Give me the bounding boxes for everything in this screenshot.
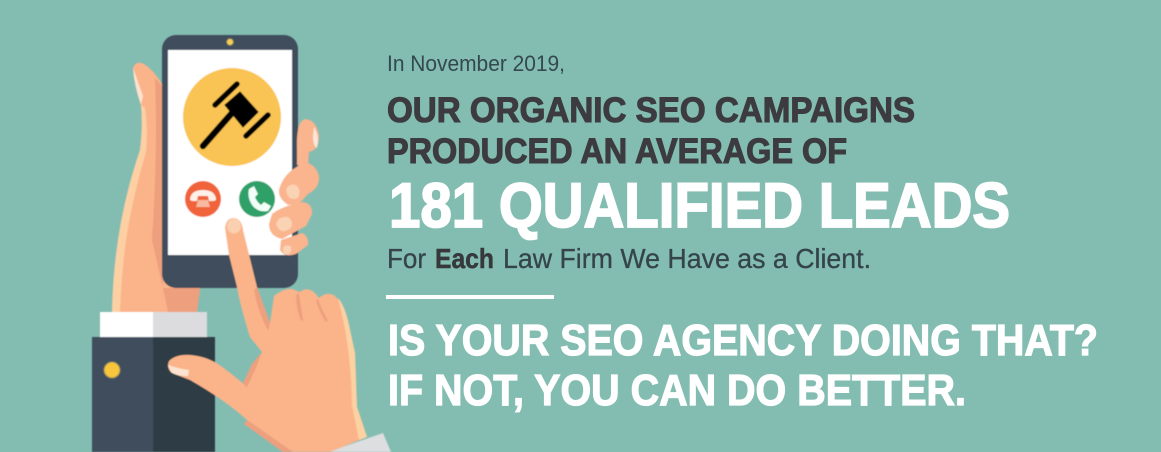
sub-statement: For <box>387 243 426 274</box>
key statistic: 181 QUALIFIED LEADS <box>389 171 1010 241</box>
jacket sleeve <box>92 337 215 452</box>
call to action: IF NOT, YOU CAN DO BETTER. <box>388 366 966 415</box>
call to action: IS YOUR SEO AGENCY DOING THAT? <box>388 316 1098 365</box>
left hand fingers <box>269 119 319 255</box>
divider <box>386 295 554 299</box>
sleeve button <box>104 362 120 378</box>
fingernail <box>227 218 241 234</box>
headline: OUR ORGANIC SEO CAMPAIGNS <box>387 91 915 130</box>
phone screen <box>168 50 292 255</box>
call to action <box>388 316 1098 415</box>
icon: accept call <box>239 181 275 217</box>
thumbnail <box>168 365 189 376</box>
right hand pointing <box>168 218 367 452</box>
headline: PRODUCED AN AVERAGE OF <box>387 132 847 171</box>
icon: decline call <box>185 181 221 217</box>
phone <box>162 35 298 288</box>
illustration: hands holding phone <box>92 35 391 452</box>
right shirt cuff <box>328 433 391 452</box>
left hand back <box>112 63 200 312</box>
cuff <box>100 312 207 337</box>
intro text: In November 2019, <box>387 51 565 76</box>
icon: gavel <box>183 68 281 166</box>
phone camera <box>226 38 234 46</box>
sub-statement: Each <box>435 243 494 274</box>
sub-statement: Law Firm We Have as a Client. <box>503 243 871 274</box>
headline <box>387 91 915 171</box>
